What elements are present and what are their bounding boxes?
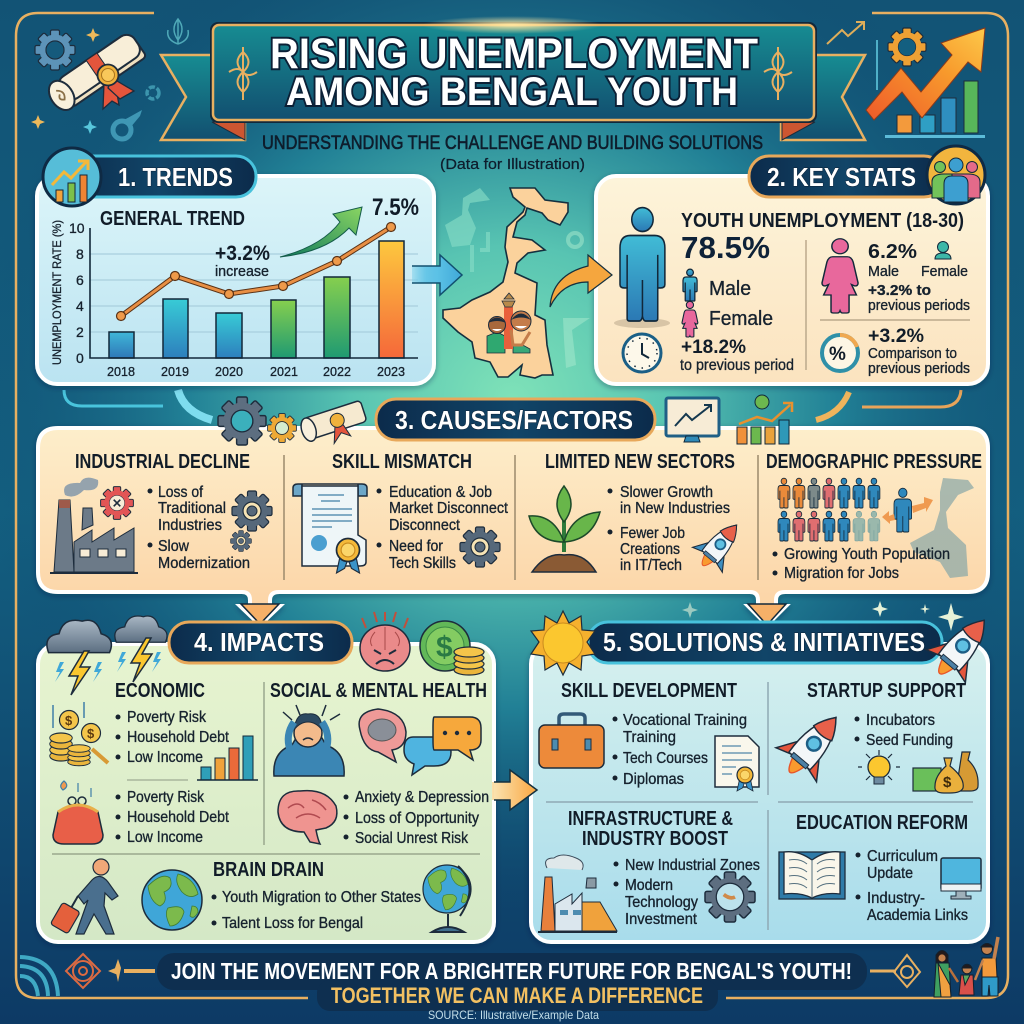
call-to-action banner: TOGETHER WE CAN MAKE A DIFFERENCE <box>331 983 703 1008</box>
title banner <box>210 16 817 123</box>
panel: solutions and initiatives <box>531 604 1004 942</box>
faint map fragments <box>445 188 490 272</box>
stat: 6.2%: Female <box>921 263 968 280</box>
icon: certificate document <box>715 736 759 791</box>
bullet list: Household Debt <box>127 809 229 826</box>
icon: open book <box>779 852 845 899</box>
stat: +18.2% <box>680 337 794 374</box>
stat: 6.2%: +3.2% to <box>868 282 931 299</box>
icon: stressed brain <box>360 612 410 671</box>
icon: briefcase <box>539 714 604 768</box>
bullet list: Vocational Training <box>623 712 747 729</box>
column: demographic pressure <box>766 451 982 582</box>
mini bar chart <box>197 736 258 780</box>
title <box>270 30 758 114</box>
column: social and mental health <box>270 680 489 847</box>
icon: gear <box>705 872 755 922</box>
icon: percent ring <box>822 335 858 371</box>
bullet list: Youth Migration to Other States <box>222 889 421 906</box>
section label: 1. Trends: 1. TRENDS <box>118 162 233 192</box>
callout: +3.2% increase <box>215 242 270 280</box>
icon: dollar coin <box>420 621 484 675</box>
bar chart: 2019 <box>161 364 189 379</box>
trend line <box>116 222 396 320</box>
chart heading: GENERAL TREND <box>100 208 245 230</box>
faint right fragments <box>563 233 590 368</box>
block: startup support: STARTUP SUPPORT <box>807 680 966 702</box>
bullet list: New Industrial Zones <box>625 857 760 874</box>
section label: 4. Impacts: 4. IMPACTS <box>194 627 324 657</box>
icon: gold knot ornament <box>870 955 920 987</box>
icon: modern factory <box>538 855 617 932</box>
bullet list: in New Industries <box>620 500 730 517</box>
bullet list: Tech Courses <box>623 750 708 767</box>
bullet list: Modernization <box>158 555 250 572</box>
map: West Bengal with youth figures <box>443 188 568 378</box>
column: skill mismatch <box>293 451 508 573</box>
icon: desk globe <box>423 865 471 932</box>
icon: rocket header <box>920 604 1004 690</box>
bullet list: Seed Funding <box>866 732 953 749</box>
icon: brain bubble <box>359 709 406 762</box>
bullet list: Anxiety & Depression <box>355 789 489 806</box>
bullet list: Growing Youth Population <box>784 546 950 563</box>
stat: +3.2% comparison: Comparison to <box>868 345 957 362</box>
bullet list <box>212 889 421 932</box>
icon: top-left gear <box>35 30 75 70</box>
bar chart: 4 <box>76 298 84 314</box>
bullet list: Training <box>623 729 676 746</box>
block: education reform <box>779 812 981 924</box>
bullet list: Diplomas <box>623 771 684 788</box>
stat: +3.2% comparison: +3.2% <box>868 326 924 347</box>
icon: distressed person <box>274 705 344 776</box>
bar chart: 2020 <box>215 364 243 379</box>
icon: walking traveller <box>50 859 118 934</box>
icons: storm clouds <box>47 616 167 695</box>
panel: impacts <box>38 612 494 942</box>
subtitle <box>262 133 763 173</box>
bullet list <box>772 546 950 582</box>
column: economic <box>50 680 258 846</box>
column: industrial decline: INDUSTRIAL DECLINE <box>75 451 250 473</box>
column: industrial decline <box>50 451 272 573</box>
bar chart: 10 <box>69 220 85 236</box>
section label: 5. Solutions & Initiatives: 5. SOLUTIONS & INITIATIVES <box>603 627 925 657</box>
stat: 6.2% <box>868 241 970 314</box>
column: skill mismatch: SKILL MISMATCH <box>332 451 472 473</box>
title: AMONG BENGAL YOUTH <box>286 70 738 114</box>
icon: header bar chart <box>737 395 792 444</box>
bullet list: Household Debt <box>127 729 229 746</box>
arrow: trends to map <box>412 255 462 295</box>
bullet list <box>376 484 508 572</box>
block: startup support <box>770 680 978 793</box>
bullet list: Loss of Opportunity <box>355 810 479 827</box>
block: skill development: SKILL DEVELOPMENT <box>561 680 737 702</box>
bullet list: Migration for Jobs <box>784 565 899 582</box>
icon: faint leaf <box>168 19 188 44</box>
stat: 6.2%: Male <box>868 263 899 280</box>
title: RISING UNEMPLOYMENT <box>270 30 758 78</box>
block: infrastructure and industry boost <box>538 808 760 932</box>
section label: 5. Solutions & Initiatives <box>588 622 942 663</box>
bullet list: Technology <box>625 894 698 911</box>
panel: causes and factors <box>38 395 988 625</box>
callout: +3.2% increase: +3.2% <box>215 242 270 265</box>
bullet list <box>614 857 760 928</box>
bar chart: 2 <box>76 324 84 340</box>
icon: light bulb <box>858 750 900 784</box>
icon: sprout <box>529 486 600 572</box>
section: brain drain <box>50 859 471 934</box>
icon: bottom-left arcs <box>20 957 58 996</box>
bullet list: Modern <box>625 877 673 894</box>
panel: key stats <box>596 146 988 384</box>
bullet list: Talent Loss for Bengal <box>222 915 363 932</box>
title ornaments <box>229 47 792 100</box>
icons: crowd of people <box>778 478 880 541</box>
bullet list: Market Disconnect <box>389 500 508 517</box>
icon: sun <box>531 611 595 675</box>
icons: header gears <box>218 397 296 445</box>
bar chart: 2018 <box>107 364 135 379</box>
block: infrastructure and industry boost: INDUSTRY BOOST <box>582 828 728 850</box>
source note: SOURCE: Illustrative/Example Data <box>428 1008 599 1022</box>
section label: 1. Trends <box>43 148 256 206</box>
bullet list: Low Income <box>127 829 203 846</box>
section label: 2. Key Stats <box>749 146 985 204</box>
value: 7.5%: 7.5% <box>372 194 419 221</box>
icon: female figure <box>822 239 858 313</box>
bullet list: Traditional <box>158 500 226 517</box>
icon: dollar coin: $ <box>436 631 453 664</box>
bar chart: 0 <box>76 350 84 366</box>
bullet list <box>344 789 489 847</box>
stat: male: Male <box>709 278 751 300</box>
stat: female <box>682 301 773 337</box>
panel: trends <box>37 148 434 384</box>
icon: money bags: $ <box>943 774 952 791</box>
call-to-action banner: JOIN THE MOVEMENT FOR A BRIGHTER FUTURE FOR BENGAL'S YOUTH! <box>171 958 852 984</box>
arrow: impacts to solutions <box>492 770 537 810</box>
bullet list <box>148 484 250 572</box>
bullet list: Need for <box>389 538 444 555</box>
bar chart: 6 <box>76 272 84 288</box>
icon: rocket <box>770 700 856 789</box>
bullet list: Slow <box>158 538 189 555</box>
subtitle: (Data for Illustration) <box>440 156 585 173</box>
call-to-action banner <box>157 953 867 1011</box>
column: limited new sectors: LIMITED NEW SECTORS <box>545 451 735 473</box>
column: economic: ECONOMIC <box>115 680 205 702</box>
bar chart <box>69 220 418 379</box>
bullet list <box>856 848 968 924</box>
icon: small sparkle stars <box>31 28 100 134</box>
icon: rising chart top right <box>827 22 985 138</box>
sparkle stars <box>682 601 964 631</box>
arrow: green growth <box>280 207 362 257</box>
arrow: map to stats <box>550 255 612 307</box>
icon: chat bubbles <box>404 717 481 775</box>
icon: purse <box>53 781 103 844</box>
bullet list: Tech Skills <box>389 555 456 572</box>
icon: certificate <box>293 484 367 573</box>
bullet list: Curriculum <box>867 848 938 865</box>
icon: brain <box>278 791 337 844</box>
downward arrows <box>241 604 786 625</box>
icon: percent ring: % <box>829 344 846 365</box>
bar chart: 2021 <box>270 364 298 379</box>
bar chart: 2022 <box>323 364 351 379</box>
stat: 6.2%: 6.2% <box>868 241 917 263</box>
section: brain drain: BRAIN DRAIN <box>213 859 324 881</box>
icon: header monitor <box>666 398 719 442</box>
faint connector curves <box>64 390 961 420</box>
stat: +18.2%: to previous period <box>680 357 794 374</box>
heading: youth unemployment: YOUTH UNEMPLOYMENT (18-30) <box>681 210 964 232</box>
block: education reform: EDUCATION REFORM <box>796 812 968 834</box>
bullet list: Loss of <box>158 484 203 501</box>
bar chart: 2023 <box>377 364 405 379</box>
section label: 3. Causes/Factors <box>376 399 655 440</box>
stat: 6.2%: previous periods <box>868 297 970 314</box>
section label: 3. Causes/Factors: 3. CAUSES/FACTORS <box>395 405 633 435</box>
bullet list: Education & Job <box>389 484 492 501</box>
bullet list: Industries <box>158 517 222 534</box>
youth figures <box>487 293 531 353</box>
icon: mandala ornament <box>66 954 100 988</box>
icon: migrating person with arrows <box>882 488 933 532</box>
icon: falling coins: $ <box>65 713 73 728</box>
faint map <box>910 478 974 578</box>
stat: +3.2% comparison: previous periods <box>868 360 970 377</box>
icons: gears <box>231 491 272 551</box>
block: skill development <box>539 680 759 791</box>
icon: faint recycle and gear shapes <box>113 87 159 139</box>
callout: +3.2% increase: increase <box>215 263 269 280</box>
bullet list: Investment <box>625 911 698 928</box>
icon: falling coins: $ <box>87 726 95 741</box>
bullet list <box>608 484 730 574</box>
block: infrastructure and industry boost: INFRASTRUCTURE & <box>568 808 733 830</box>
stat: female: Female <box>709 308 773 330</box>
bullet list: Social Unrest Risk <box>355 830 469 847</box>
icon: rocket <box>688 513 751 578</box>
bullet list: Industry- <box>867 890 925 907</box>
bullet list <box>116 789 229 846</box>
icon: clock <box>623 334 661 372</box>
icon: gear <box>460 527 500 567</box>
bullet list: Slower Growth <box>620 484 713 501</box>
icon: earth globe <box>142 870 202 930</box>
column: limited new sectors <box>529 451 751 578</box>
icon: header diploma <box>298 400 370 452</box>
bullet list: Update <box>867 865 913 882</box>
icon: falling coins <box>50 702 108 766</box>
bar chart: 8 <box>76 246 84 262</box>
y axis label: UNEMPLOYMENT RATE (%) <box>50 220 64 365</box>
bullet list: Academia Links <box>867 907 968 924</box>
section label: 4. Impacts <box>169 622 352 663</box>
section label: 2. Key Stats: 2. KEY STATS <box>767 162 916 192</box>
stat: +3.2% comparison <box>868 326 970 377</box>
subtitle: UNDERSTANDING THE CHALLENGE AND BUILDING SOLUTIONS <box>262 133 763 154</box>
title ribbon tails <box>161 55 865 140</box>
bullet list: Creations <box>620 541 680 558</box>
bullet list: Fewer Job <box>620 525 685 542</box>
stat: +18.2%: +18.2% <box>681 337 746 358</box>
bullet list <box>612 712 747 788</box>
stat: male <box>683 269 751 301</box>
bullet list: in IT/Tech <box>620 557 682 574</box>
bullet list: Low Income <box>127 749 203 766</box>
column: social and mental health: SOCIAL & MENTAL HEALTH <box>270 680 487 702</box>
icon: factory <box>50 478 138 573</box>
bullet list: Incubators <box>866 712 935 729</box>
bullet list <box>116 709 229 766</box>
stat: 78.5%: 78.5% <box>681 230 770 265</box>
icon: fleur ornament left <box>108 959 155 982</box>
icon: big person <box>614 208 670 328</box>
bullet list: Poverty Risk <box>127 709 207 726</box>
icon: family group <box>934 937 998 997</box>
bullet list <box>854 712 953 749</box>
bullet list: Disconnect <box>389 517 460 534</box>
bullet list: Poverty Risk <box>127 789 205 806</box>
icon: money bags <box>913 752 978 793</box>
icon: top-left diploma <box>44 30 147 115</box>
icon: desktop monitor <box>941 858 981 899</box>
